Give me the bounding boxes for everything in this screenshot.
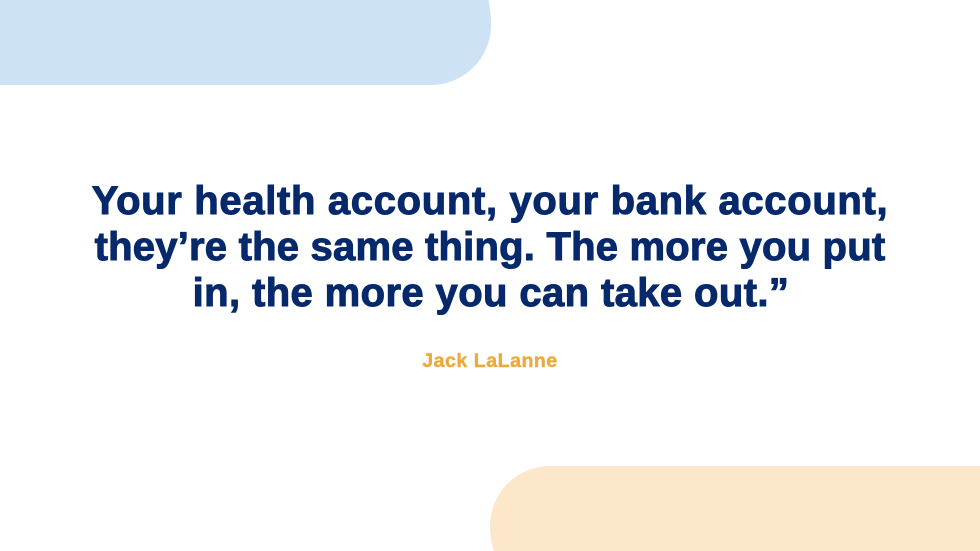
attribution: Jack LaLanne xyxy=(422,350,558,372)
quote text: they’re the same thing. The more you put xyxy=(95,225,885,269)
decorative peach shape bottom right xyxy=(490,466,980,551)
quote text: Your health account, your bank account, xyxy=(92,179,888,223)
quote text xyxy=(92,179,888,315)
decorative blue shape top left xyxy=(0,0,491,85)
quote text: in, the more you can take out.” xyxy=(193,271,789,315)
